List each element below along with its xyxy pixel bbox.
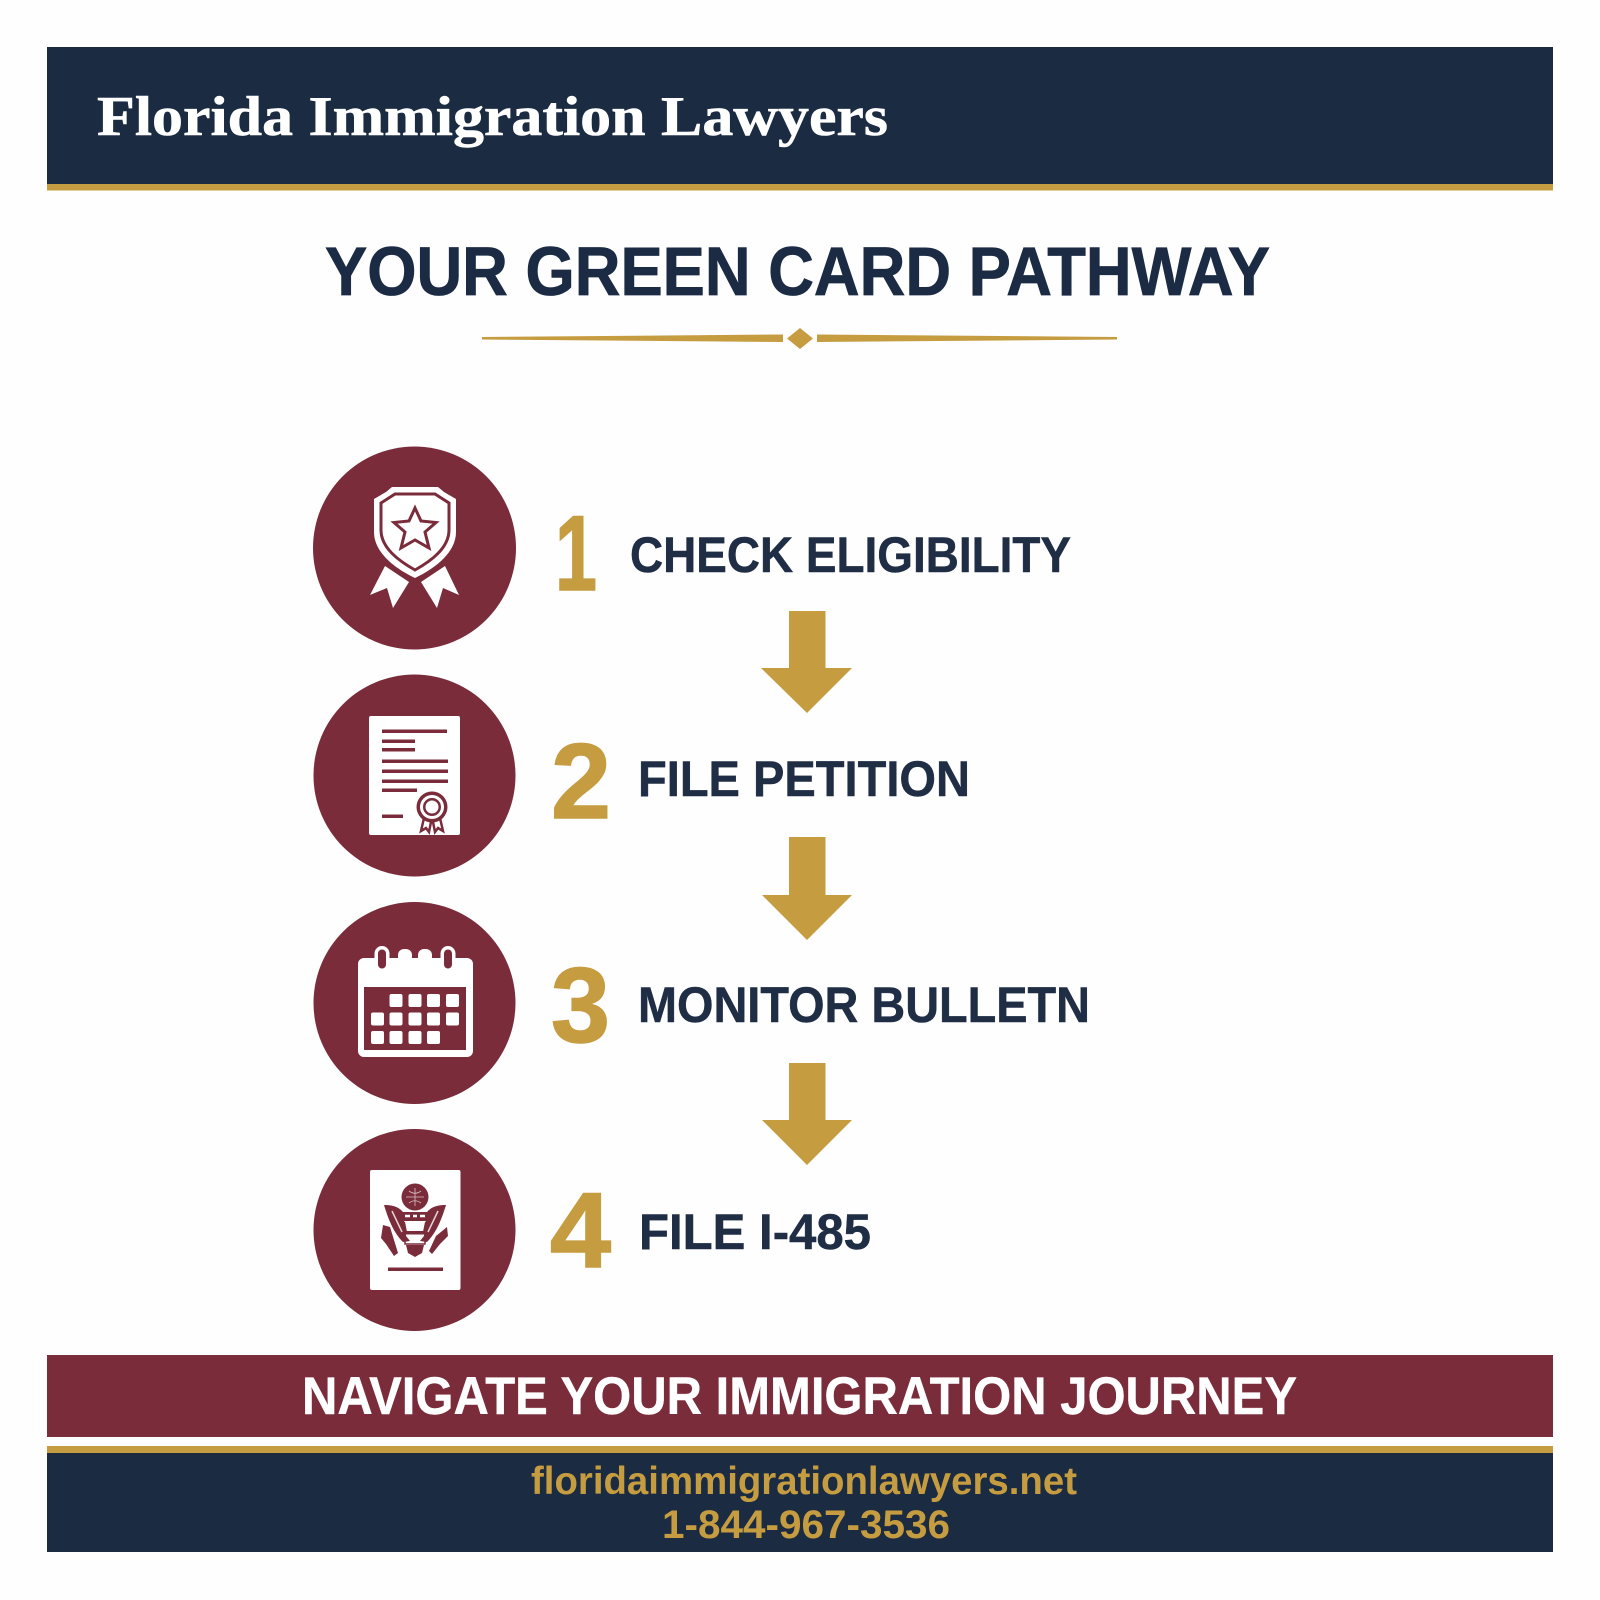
number 4: 4 xyxy=(550,1170,611,1290)
title: YOUR GREEN CARD PATHWAY xyxy=(325,233,1270,310)
label: FILE I-485 xyxy=(639,1204,871,1260)
title divider xyxy=(482,328,1117,349)
label: MONITOR BULLETN xyxy=(638,977,1090,1033)
header banner xyxy=(47,47,1553,190)
label: CHECK ELIGIBILITY xyxy=(630,527,1071,583)
step 2 xyxy=(314,674,970,876)
passport emblem xyxy=(381,1184,448,1257)
icon: passport xyxy=(314,1129,516,1331)
arrow 1 to 2 xyxy=(761,611,852,713)
number 3: 3 xyxy=(551,945,610,1065)
number 2: 2 xyxy=(551,721,611,841)
label: FILE PETITION xyxy=(638,751,970,807)
call to action text: NAVIGATE YOUR IMMIGRATION JOURNEY xyxy=(302,1367,1297,1426)
icon: award shield xyxy=(313,446,516,650)
phone: 1-844-967-3536 xyxy=(662,1503,950,1547)
step 4 xyxy=(314,1129,871,1331)
arrow 3 to 4 xyxy=(762,1063,852,1165)
website: floridaimmigrationlawyers.net xyxy=(531,1460,1077,1503)
arrow 2 to 3 xyxy=(762,837,852,940)
icon: petition document xyxy=(314,674,516,876)
brand name: Florida Immigration Lawyers xyxy=(97,86,888,148)
number 1: 1 xyxy=(555,493,597,613)
step 1 xyxy=(313,446,1071,650)
contact footer xyxy=(47,1446,1553,1552)
call to action banner xyxy=(47,1355,1553,1437)
icon: calendar xyxy=(314,902,516,1104)
step 3 xyxy=(314,902,1090,1104)
